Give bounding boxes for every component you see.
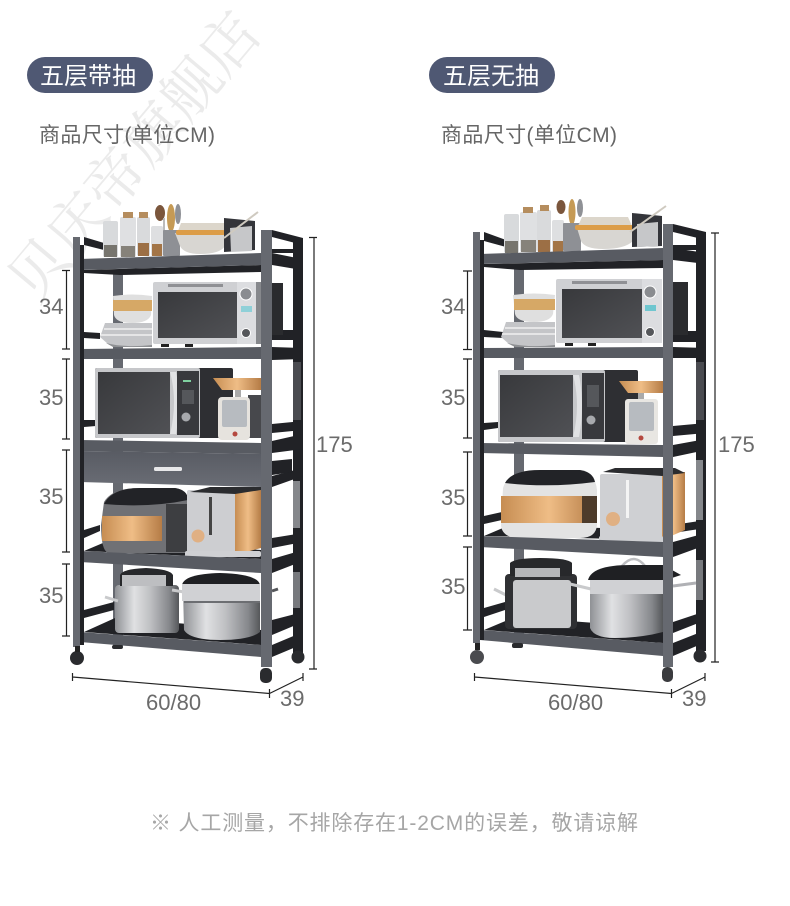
- badge: five tiers without drawer: [429, 57, 555, 93]
- kitchen scale: [619, 381, 663, 444]
- stock pot: [105, 568, 179, 633]
- top shelf items: spice jars, utensils, bowl, bag: [103, 204, 258, 257]
- shelf front bars: [480, 248, 663, 656]
- kitchen scale: [213, 378, 261, 440]
- badge: five tiers with drawer: [27, 57, 153, 93]
- right rack without drawer: [470, 199, 706, 682]
- shelf front bars: [80, 253, 261, 657]
- casters: [470, 643, 706, 682]
- rice cooker: [101, 488, 188, 553]
- toaster oven: [556, 279, 688, 346]
- rice cooker: [501, 470, 597, 538]
- height label 35 lower: 35: [441, 574, 465, 599]
- shelf side bars: [272, 253, 303, 657]
- toaster: [599, 468, 685, 543]
- left rack with drawer: [70, 204, 304, 683]
- dimension lines: [463, 233, 719, 698]
- shelf 3 microwave: [498, 370, 638, 442]
- height label 35 middle: 35: [441, 485, 465, 510]
- rack back frame: [84, 230, 303, 653]
- depth 39: 39: [280, 686, 304, 711]
- shelf 3 microwave: [95, 368, 233, 438]
- subtitle right: product size: 商品尺寸(单位CM): [441, 124, 617, 147]
- stock pot: [494, 558, 577, 629]
- height label 34: 34: [441, 294, 465, 319]
- left rack dimensions: [39, 238, 353, 715]
- height label 35 upper: 35: [39, 385, 63, 410]
- depth 39: 39: [682, 686, 706, 711]
- shelf side bars: [673, 248, 706, 656]
- toaster oven: [153, 282, 283, 347]
- casters: [70, 645, 304, 683]
- width 60/80: 60/80: [548, 690, 603, 715]
- total height 175: 175: [316, 432, 353, 457]
- subtitle left: product size: 商品尺寸(单位CM): [39, 124, 215, 147]
- stack of bowls and plates: [501, 294, 555, 347]
- width 60/80: 60/80: [146, 690, 201, 715]
- badge: five tiers without drawer: 五层无抽: [443, 63, 539, 90]
- badge: five tiers with drawer: 五层带抽: [40, 63, 136, 90]
- total height 175: 175: [718, 432, 755, 457]
- toaster: [185, 487, 261, 557]
- front posts: [73, 230, 272, 667]
- stack of bowls and plates: [100, 294, 152, 347]
- height label 35 middle: 35: [39, 484, 63, 509]
- top shelf items: spice jars, utensils, bowl, bag: [504, 199, 666, 253]
- rack back frame: [484, 224, 706, 651]
- height label 35 lower: 35: [39, 583, 63, 608]
- height label 34: 34: [39, 294, 63, 319]
- large pot: [172, 573, 278, 640]
- large pot: [570, 559, 696, 638]
- right rack dimensions: [441, 233, 755, 715]
- footnote: ※ 人工测量，不排除存在1-2CM的误差，敬请谅解: [150, 812, 638, 835]
- dimension lines: [62, 238, 317, 698]
- height label 35 upper: 35: [441, 385, 465, 410]
- front posts: [473, 224, 673, 667]
- drawer: [80, 451, 261, 487]
